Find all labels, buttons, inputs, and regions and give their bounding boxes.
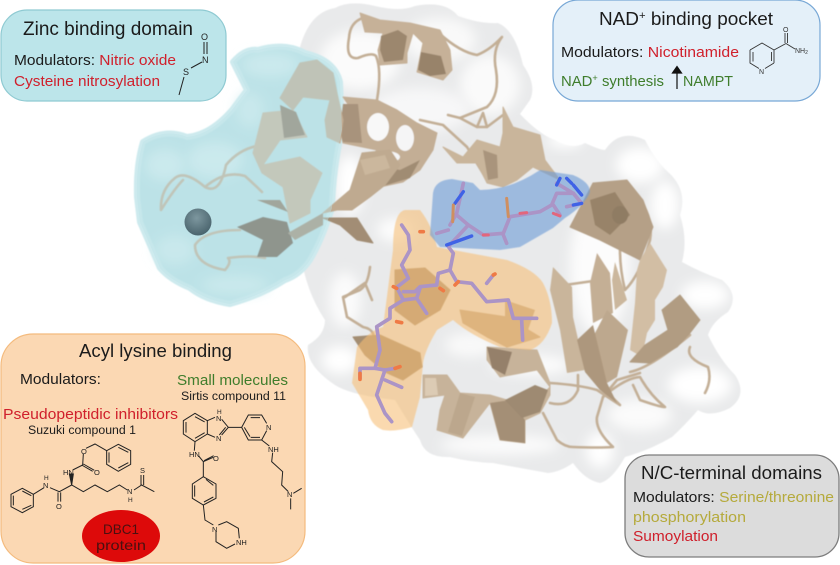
molecule: nicotinamide: O bbox=[783, 27, 789, 34]
oval: DBC1 protein bbox=[82, 510, 160, 562]
text: Sirtis compound 11: Sirtis compound 11 bbox=[181, 391, 286, 403]
arrow: up bbox=[672, 66, 682, 89]
molecule: Suzuki compound 1: N bbox=[43, 481, 48, 490]
top helix bbox=[360, 13, 452, 80]
panel: zinc binding domain bbox=[1, 10, 226, 101]
text: NAD+ synthesis: NAD bbox=[561, 74, 592, 90]
text: modulators: Modulators: bbox=[20, 372, 101, 388]
molecule: nicotinamide: N bbox=[759, 69, 764, 76]
central helix bbox=[443, 107, 560, 187]
molecule: Suzuki compound 1: H bbox=[44, 475, 49, 482]
molecule: Sirtis compound 11: O bbox=[213, 454, 219, 463]
left cross helix bbox=[323, 150, 400, 213]
acyl lysine pocket highlight bbox=[352, 210, 552, 431]
heading: N/C-terminal domains: N/C-terminal domains bbox=[641, 462, 822, 483]
molecule: Sirtis compound 11: NH bbox=[268, 445, 279, 454]
molecule: S-nitroso: O bbox=[201, 32, 208, 42]
molecule: Sirtis compound 11: N bbox=[212, 525, 217, 534]
molecule: Sirtis compound 11 bbox=[183, 409, 302, 548]
molecule: Sirtis compound 11: N bbox=[216, 414, 221, 423]
text: NAD+ synthesis: synthesis bbox=[598, 74, 664, 90]
protein structure bbox=[137, 3, 740, 483]
molecule: Sirtis compound 11: N bbox=[216, 434, 221, 443]
ligand sticks bbox=[360, 178, 582, 422]
heading: NAD+ binding pocket: binding pocket bbox=[646, 8, 773, 29]
panel: acyl lysine binding bbox=[1, 334, 305, 563]
panel: N/C-terminal domains bbox=[625, 455, 839, 557]
molecule: S-nitroso: S bbox=[183, 67, 189, 77]
helices beneath the ligand bbox=[353, 335, 422, 380]
zinc domain helices bbox=[280, 60, 343, 143]
molecule: Suzuki compound 1: N bbox=[127, 487, 132, 496]
panel: NAD+ binding pocket bbox=[553, 0, 820, 101]
molecule: Sirtis compound 11: N bbox=[266, 423, 271, 432]
molecule: Sirtis compound 11: HN bbox=[189, 450, 200, 459]
right beta sheet bbox=[550, 267, 585, 373]
heading: zinc binding domain: Zinc binding domain bbox=[23, 19, 193, 40]
text: Suzuki compound 1: Suzuki compound 1 bbox=[28, 425, 136, 437]
molecule: nicotinamide: NH bbox=[795, 48, 805, 55]
zinc binding domain surface bbox=[137, 47, 342, 304]
molecule: Suzuki compound 1: HN bbox=[63, 468, 74, 477]
molecule: Suzuki compound 1 bbox=[11, 444, 154, 513]
right helix upper bbox=[570, 180, 653, 260]
molecule: Sirtis compound 11: N bbox=[287, 490, 292, 499]
grey molecular surface bbox=[300, 3, 740, 483]
text: serine/threonine modulators: Modulators: Serine/threonine bbox=[633, 490, 834, 506]
molecule: Suzuki compound 1: H bbox=[128, 497, 133, 504]
tan ribbon cartoon bbox=[161, 13, 709, 448]
middle helix bbox=[340, 97, 437, 187]
molecule: Suzuki compound 1: O bbox=[81, 447, 87, 456]
molecule: Suzuki compound 1: O bbox=[94, 468, 100, 477]
zinc ion bbox=[184, 208, 212, 236]
heading: NAD+ binding pocket: NAD bbox=[599, 8, 638, 29]
oval: DBC1 protein: DBC1 bbox=[103, 521, 139, 537]
NAD pocket highlight bbox=[430, 170, 590, 250]
text: NAMPT: NAMPT bbox=[683, 74, 733, 90]
molecule: Suzuki compound 1: O bbox=[56, 502, 62, 511]
molecule: Sirtis compound 11: H bbox=[217, 409, 222, 416]
text: pseudopeptidic inhibitors: Pseudopeptidic inhibitors bbox=[3, 406, 178, 423]
zinc domain beta strands bbox=[237, 217, 293, 257]
molecule: nicotinamide bbox=[750, 27, 808, 76]
molecule: S-nitroso bbox=[179, 32, 208, 95]
text: nicotinamide modulator: Modulators: Nicotinamide bbox=[561, 45, 739, 61]
bottom helix bbox=[423, 347, 550, 443]
text: phosphorylation: phosphorylation bbox=[633, 510, 746, 526]
text: nitric oxide modulators: Modulators: Nitric oxide bbox=[14, 53, 176, 69]
text: NAD+ synthesis: + bbox=[592, 73, 598, 83]
oval: DBC1 protein: protein bbox=[96, 537, 146, 553]
molecule: Sirtis compound 11: NH bbox=[236, 538, 247, 547]
molecule: nicotinamide: 2 bbox=[805, 50, 808, 56]
molecule: Suzuki compound 1: S bbox=[140, 466, 145, 475]
thin loops bbox=[161, 18, 709, 448]
heading: acyl lysine binding: Acyl lysine binding bbox=[79, 340, 232, 361]
text: cysteine nitrosylation: Cysteine nitrosylation bbox=[14, 74, 160, 90]
zinc domain translucent overlay bbox=[137, 47, 342, 304]
molecule: S-nitroso: N bbox=[202, 55, 208, 65]
text: sumoylation: Sumoylation bbox=[633, 529, 718, 545]
text: small molecules: Small molecules bbox=[177, 372, 288, 389]
heading: NAD+ binding pocket: + bbox=[639, 10, 646, 22]
